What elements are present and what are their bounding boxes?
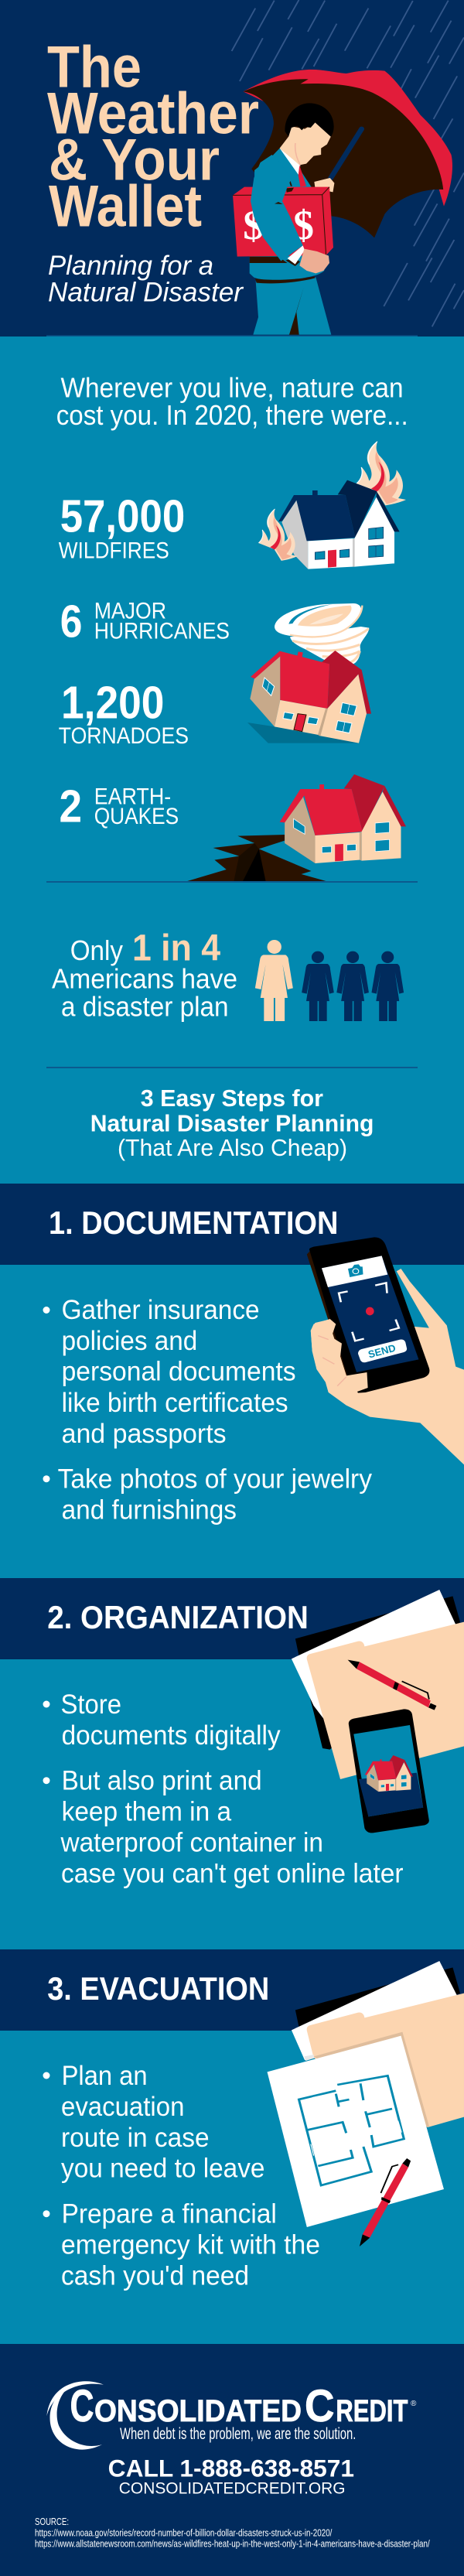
section band: organization: 2. ORGANIZATION <box>47 1599 309 1635</box>
figure 3 <box>336 951 369 1021</box>
text: only 1 in 4: Americans have <box>52 962 237 994</box>
left flame <box>258 508 298 561</box>
icon: four women, one highlighted <box>255 940 404 1021</box>
panel: main teal background <box>0 337 464 2344</box>
bullets: evacuation: Prepare a financial <box>62 2198 277 2229</box>
black sheet <box>295 1596 460 1750</box>
section band: organization <box>0 1578 464 1659</box>
folder <box>307 1993 464 2127</box>
windows <box>262 678 357 733</box>
highlighted figure <box>255 940 293 1021</box>
intro text <box>56 371 408 431</box>
title: Wallet <box>49 174 202 240</box>
bullets: documentation: Take photos of your jewelry <box>58 1464 372 1494</box>
bullets: organization: documents digitally <box>62 1720 281 1751</box>
icon: folder, floor plan and pen <box>268 1961 464 2246</box>
intro text: Wherever you live, nature can <box>60 371 404 403</box>
section band: documentation <box>0 1184 464 1265</box>
stat: tornadoes <box>59 677 189 749</box>
logo swoosh <box>46 2381 104 2450</box>
icon: hand holding phone <box>307 1237 464 1464</box>
pen <box>360 2234 370 2246</box>
phone <box>349 1709 429 1833</box>
heading: 3 easy steps <box>90 1085 374 1161</box>
right flame <box>357 441 406 505</box>
bullets: organization: Store <box>60 1689 121 1720</box>
text: only 1 in 4 <box>52 928 237 1022</box>
bullets: documentation: personal documents <box>62 1357 296 1386</box>
send label: SEND <box>367 1342 397 1361</box>
figure 2 <box>302 951 334 1021</box>
bullets: organization: waterproof container in <box>60 1827 323 1857</box>
face and neck <box>280 122 331 165</box>
bullets: evacuation: emergency kit with the <box>61 2229 320 2260</box>
panel: footer <box>0 2344 464 2576</box>
stat: hurricanes <box>60 596 230 647</box>
intro text: cost you. In 2020, there were... <box>56 399 408 431</box>
panel: header <box>0 0 464 337</box>
floor plan sheet <box>268 2036 444 2227</box>
phone <box>307 1247 358 1392</box>
bullets: evacuation: evacuation <box>61 2092 184 2122</box>
ground crack <box>186 835 327 881</box>
text: only 1 in 4: Only <box>70 934 123 966</box>
door <box>294 714 306 732</box>
logo: Consolidated Credit: C <box>305 2381 334 2431</box>
icon: house by earthquake crack <box>186 774 406 881</box>
left wall <box>281 501 308 569</box>
folder <box>307 1622 464 1779</box>
bullets: documentation: and passports <box>62 1419 227 1449</box>
bullets: documentation: and furnishings <box>62 1495 237 1525</box>
back roof <box>338 480 377 538</box>
stat: tornadoes: TORNADOES <box>59 723 189 749</box>
fingers <box>311 1319 368 1392</box>
pen <box>348 1660 360 1669</box>
stat: wildfires <box>59 490 185 564</box>
call to action <box>108 2455 354 2497</box>
stat: earthquakes: EARTH- <box>94 784 171 809</box>
arm <box>251 155 303 261</box>
sources: SOURCE: <box>35 2516 69 2527</box>
black sheet <box>295 1967 460 2060</box>
bullets: evacuation: route in case <box>61 2123 210 2153</box>
main roof <box>278 495 355 541</box>
white sheet <box>292 1961 457 2060</box>
stat: wildfires: WILDFIRES <box>59 538 169 564</box>
bullets: documentation <box>43 1295 372 1525</box>
floor plan lines <box>299 2075 404 2185</box>
heading: 3 easy steps: 3 Easy Steps for <box>141 1085 323 1112</box>
call to action: CALL 1-888-638-8571 <box>108 2455 354 2482</box>
send button <box>358 1339 407 1362</box>
bullets: evacuation: Plan an <box>62 2061 148 2091</box>
call to action: CONSOLIDATEDCREDIT.ORG <box>119 2479 346 2497</box>
text: only 1 in 4: 1 in 4 <box>132 928 220 969</box>
icon: man with umbrella holding money box: $ <box>243 202 264 248</box>
tornado swirl <box>275 603 369 664</box>
house <box>280 774 406 863</box>
mini house <box>365 1755 413 1792</box>
logo: Consolidated Credit: ® <box>411 2400 417 2408</box>
logo: Consolidated Credit <box>46 2381 417 2450</box>
bullets: documentation: policies and <box>62 1326 197 1356</box>
windows <box>315 527 384 559</box>
title: The <box>47 35 142 101</box>
section band: documentation: 1. DOCUMENTATION <box>49 1204 338 1241</box>
icon: tornado lifting house <box>247 603 371 743</box>
bullets: documentation: like birth certificates <box>62 1388 288 1418</box>
stat: earthquakes: 2 <box>59 781 82 832</box>
hand back <box>311 1269 464 1464</box>
bullets: evacuation: you need to leave <box>61 2153 264 2183</box>
bullets: organization: case you can't get online later <box>61 1858 404 1888</box>
heading: 3 easy steps: Natural Disaster Planning <box>90 1110 374 1136</box>
bullets: documentation: Gather insurance <box>62 1295 260 1325</box>
section band: evacuation <box>0 1949 464 2031</box>
heading: 3 easy steps: (That Are Also Cheap) <box>118 1135 347 1161</box>
logo: Consolidated Credit: ONSOLIDATED <box>94 2394 302 2428</box>
subtitle <box>48 251 244 307</box>
shirt and tie <box>280 149 300 176</box>
icon: burning house <box>258 441 406 569</box>
stat: hurricanes: 6 <box>60 596 82 647</box>
bullets: organization: keep them in a <box>62 1796 232 1826</box>
logo: Consolidated Credit: REDIT <box>336 2394 408 2428</box>
stat: earthquakes: QUAKES <box>94 804 179 829</box>
logo: Consolidated Credit: C <box>70 2381 94 2431</box>
stat: tornadoes: 1,200 <box>61 677 164 728</box>
subtitle: Planning for a <box>48 251 213 281</box>
left wall <box>250 656 280 726</box>
torso <box>254 149 326 232</box>
trousers <box>253 277 331 335</box>
bullets: organization: But also print and <box>62 1765 262 1795</box>
walls <box>319 675 367 743</box>
screen <box>322 1256 418 1372</box>
figure 4 <box>371 951 404 1021</box>
icon: folder, papers, pen and phone <box>292 1590 464 1833</box>
bullets: organization <box>43 1689 404 1888</box>
title: & Your <box>49 128 220 193</box>
front wall <box>308 538 353 569</box>
stat: hurricanes: MAJOR <box>94 598 166 624</box>
icon: man with umbrella holding money box: $ <box>293 202 314 248</box>
lower jacket <box>250 254 325 280</box>
sources <box>35 2516 430 2549</box>
white sheet <box>292 1590 455 1741</box>
title <box>47 35 259 240</box>
door <box>328 550 336 568</box>
stat: wildfires: 57,000 <box>60 490 185 542</box>
sources: https://www.noaa.gov/stories/record-number-of-billion-dollar-disasters-struck-us-in-2020/ <box>35 2526 333 2538</box>
rain <box>232 0 464 326</box>
upper hand <box>314 178 334 192</box>
bullets: evacuation <box>43 2061 320 2291</box>
stat: earthquakes <box>59 781 179 832</box>
divider line <box>46 881 418 883</box>
logo: Consolidated Credit: When debt is the problem, we are the solution. <box>120 2425 356 2443</box>
money box <box>233 187 329 257</box>
text: only 1 in 4: a disaster plan <box>61 990 229 1022</box>
icon: man with umbrella holding money box <box>233 70 452 335</box>
camera <box>348 1264 363 1277</box>
right wing <box>354 497 394 567</box>
main roof <box>251 651 329 709</box>
cuff and pocket hand <box>285 258 300 266</box>
brackets <box>339 1283 399 1341</box>
title: Weather <box>47 81 259 147</box>
subtitle: Natural Disaster <box>48 277 244 307</box>
bullets: evacuation: cash you'd need <box>61 2260 249 2291</box>
stat: hurricanes: HURRICANES <box>94 618 230 644</box>
shadow <box>247 723 359 743</box>
section band: evacuation: 3. EVACUATION <box>47 1970 269 2007</box>
back roof <box>322 651 371 714</box>
